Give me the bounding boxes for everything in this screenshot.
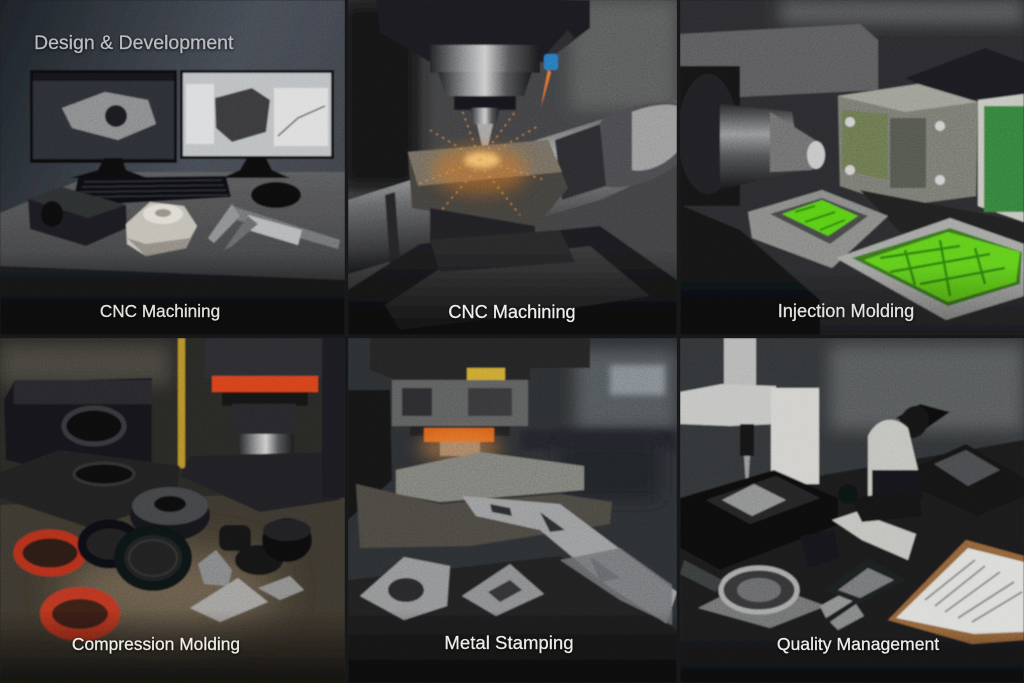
digital device xyxy=(918,444,1024,516)
stamped strip xyxy=(462,496,677,628)
panel: injection molding xyxy=(678,0,1024,335)
large cylinder workpiece xyxy=(348,100,677,274)
metal small parts xyxy=(190,550,304,622)
black rubber rings xyxy=(82,524,187,586)
stamping press xyxy=(370,338,590,436)
label: Quality Management: Quality Management xyxy=(777,634,939,654)
loose stamped parts xyxy=(560,548,672,625)
left monitor xyxy=(30,70,177,178)
mouse xyxy=(251,182,301,208)
bin of green pellets xyxy=(836,218,1024,320)
label: Injection Molding: Injection Molding xyxy=(778,301,914,321)
mold block xyxy=(838,84,978,206)
lower machine base xyxy=(680,205,820,335)
stamped plate left xyxy=(360,557,450,620)
black rubber bushings xyxy=(219,518,312,575)
red seal rings xyxy=(18,534,114,635)
label: Metal Stamping: Metal Stamping xyxy=(444,632,574,653)
rotary spindle xyxy=(678,66,825,206)
white prototype part xyxy=(126,202,197,256)
clipboard checklist xyxy=(888,540,1024,644)
green side panel xyxy=(978,94,1024,222)
black prototype part xyxy=(28,187,127,246)
label: CNC Machining center: CNC Machining xyxy=(448,302,576,322)
die base xyxy=(348,390,612,548)
panel: quality management xyxy=(680,338,1024,683)
mold tray with green parts xyxy=(748,190,888,268)
workshop floor xyxy=(0,490,345,683)
panel: metal stamping xyxy=(348,338,677,683)
digital caliper xyxy=(208,204,340,250)
panel: compression molding xyxy=(0,338,345,683)
sparks xyxy=(415,110,545,215)
orange glow die xyxy=(418,428,502,463)
right monitor xyxy=(180,70,334,178)
coolant nozzle xyxy=(541,30,574,107)
black mold blocks xyxy=(0,378,180,528)
flanged rubber part xyxy=(130,487,210,541)
machine hood xyxy=(680,24,878,100)
panel: design and development xyxy=(0,0,345,335)
bench surface xyxy=(348,556,677,683)
panel: CNC machining spindle xyxy=(340,0,677,335)
label: Compression Molding: Compression Molding xyxy=(72,634,240,654)
keypad block xyxy=(824,558,906,604)
heading: Design & Development: Design & Development xyxy=(34,32,234,54)
compression press xyxy=(180,338,345,512)
machined block xyxy=(407,140,568,242)
coordinate measuring machine xyxy=(680,338,838,570)
machine bed xyxy=(348,226,677,335)
spindle housing xyxy=(376,0,590,146)
gauge instrument xyxy=(680,560,826,628)
gauge blocks xyxy=(800,530,864,630)
label: CNC Machining left: CNC Machining xyxy=(100,301,220,321)
stamped plate right xyxy=(462,564,544,616)
keyboard xyxy=(72,176,231,206)
desk surface xyxy=(0,172,345,316)
microscope xyxy=(832,400,950,560)
